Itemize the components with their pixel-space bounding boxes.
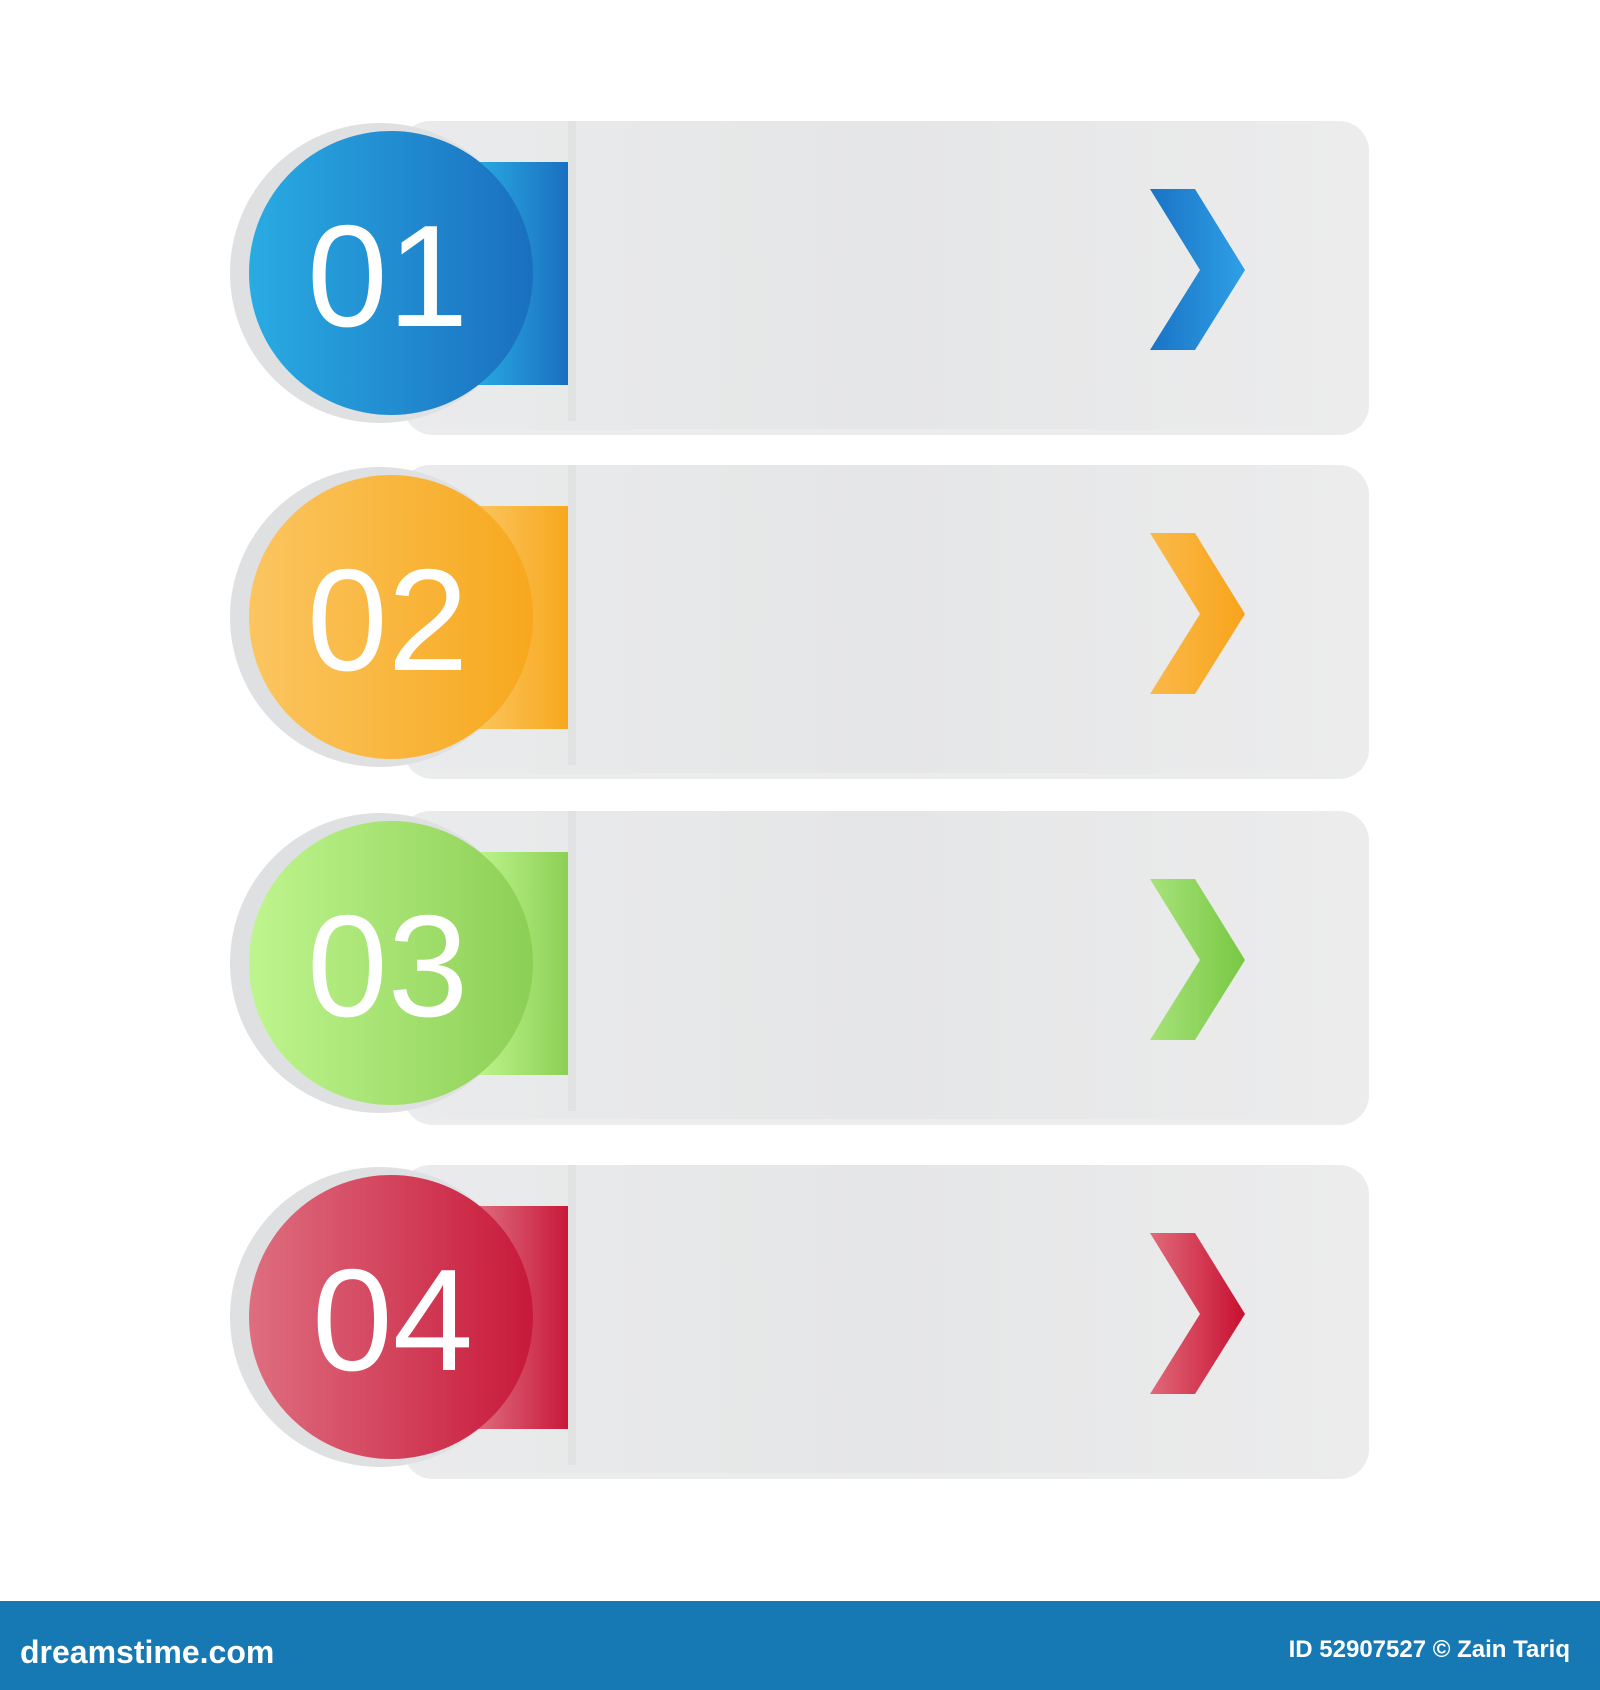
icon: chevron 03 xyxy=(1150,879,1245,1040)
footer text left: dreamstime.com xyxy=(20,1634,274,1670)
icon: chevron 04 xyxy=(1150,1233,1245,1394)
panel: step 03 xyxy=(230,811,1369,1125)
number 02: 02 xyxy=(307,539,468,701)
panel: step 04 xyxy=(230,1165,1369,1479)
footer bar xyxy=(0,1601,1600,1690)
icon: chevron 02 xyxy=(1150,533,1245,694)
icon: chevron 01 xyxy=(1150,189,1245,350)
footer text right: ID 52907527 © Zain Tariq xyxy=(1289,1636,1570,1663)
panel: step 02 xyxy=(230,465,1369,779)
number 04: 04 xyxy=(312,1239,473,1401)
number 01: 01 xyxy=(307,195,468,357)
panel: step 01 xyxy=(230,121,1369,435)
number 03: 03 xyxy=(307,885,468,1047)
